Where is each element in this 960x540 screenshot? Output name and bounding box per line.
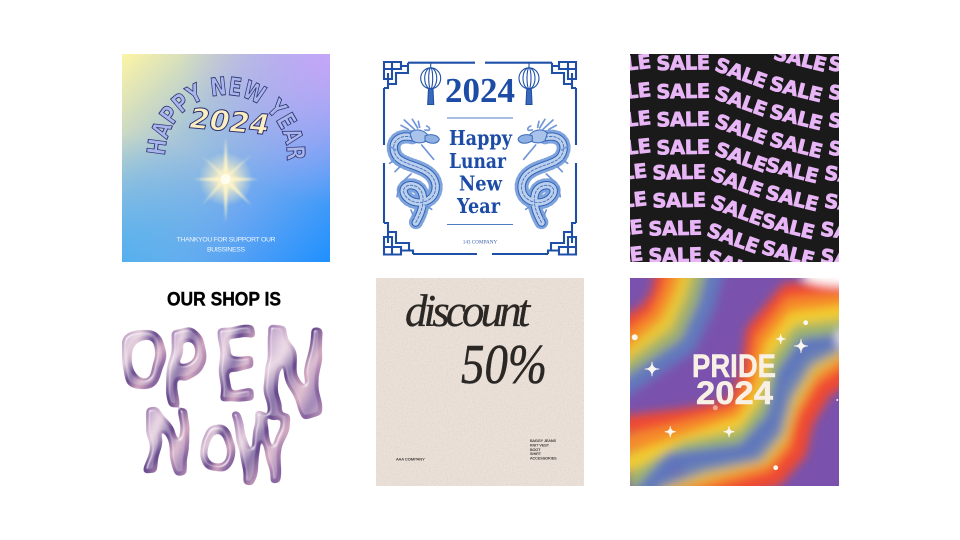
- panel: pride 2024 poster: [630, 278, 839, 486]
- icon: sparkling star: [194, 137, 258, 222]
- chrome lettering: P: [165, 314, 202, 428]
- title: [694, 354, 776, 404]
- thank you message: THANKYOU FOR SUPPORT OUR: [176, 236, 276, 244]
- repeated sale words: SALE: [648, 217, 702, 240]
- illustration: left dragon: [390, 119, 439, 223]
- greeting text: Year: [456, 194, 501, 218]
- illustration: right dragon: [518, 119, 568, 223]
- repeated sale words: SALE: [652, 189, 706, 212]
- repeated sale words: SALE: [763, 181, 821, 216]
- greeting text: Lunar: [449, 149, 507, 173]
- repeated sale words: SALE: [763, 153, 821, 188]
- repeated sale words: SALE: [656, 80, 710, 103]
- arched heading: HAPPY NEW YEAR: [146, 76, 306, 161]
- chrome lettering: [122, 324, 323, 486]
- repeated sale words: SALE: [596, 78, 652, 107]
- repeated sale words: SALE: [759, 209, 817, 244]
- panel: wavy sale pattern: [630, 54, 839, 262]
- repeated sale words: SALE: [827, 80, 883, 111]
- repeated sale words: SALE: [592, 187, 648, 216]
- chrome lettering: O: [201, 418, 236, 488]
- panel: happy lunar new year poster: [384, 62, 576, 254]
- repeated sale words: SALE: [819, 244, 875, 275]
- repeated sale words: SALE: [656, 108, 710, 131]
- icon: left lantern: [421, 63, 441, 104]
- repeated sale words: SALE: [823, 189, 879, 220]
- purple background: [630, 278, 839, 486]
- product list: BOOT: [530, 448, 541, 452]
- repeated sale words: SALE: [588, 215, 644, 244]
- repeated sale words: SALE: [819, 217, 875, 248]
- divider bottom: [447, 224, 513, 226]
- repeated sale words: SALE: [712, 110, 770, 149]
- repeated sale words: SALE: [648, 244, 702, 267]
- sparkles: [632, 320, 838, 470]
- title: 2024: [696, 375, 773, 411]
- repeated sale words: SALE: [596, 134, 652, 163]
- gradient background: [122, 54, 330, 262]
- repeated sale words: SALE: [588, 242, 644, 271]
- repeated sale words: SALE: [767, 100, 825, 135]
- product list: [530, 439, 557, 460]
- chrome lettering: N: [141, 394, 193, 494]
- panel: discount poster: [376, 278, 584, 486]
- repeated sale words: SALE: [656, 136, 710, 159]
- thank you message: BUISSINESS: [207, 246, 245, 254]
- heading: OUR SHOP IS: [167, 290, 281, 310]
- title: PRIDE: [692, 348, 776, 384]
- repeated sale words: SALE: [771, 42, 829, 77]
- greeting text: [449, 126, 513, 218]
- repeated sale words: SALE: [712, 53, 770, 93]
- repeated sale words: SALE: [652, 161, 706, 184]
- greeting text: New: [459, 172, 503, 196]
- chrome lettering: O: [120, 319, 167, 403]
- repeated sale words: SALE: [759, 236, 817, 271]
- repeated sale words: SALE: [767, 72, 825, 107]
- chrome lettering: E: [213, 313, 261, 420]
- product list: ACCESSORIES: [530, 456, 557, 460]
- greeting text: Happy: [449, 126, 513, 150]
- repeated sale words: SALE: [827, 136, 883, 167]
- repeated sale words: SALE: [656, 51, 710, 75]
- panel: happy new year poster: [122, 54, 330, 262]
- discount heading: discount: [405, 286, 532, 336]
- company name: AAA COMPANY: [396, 456, 425, 462]
- repeated sale words: SALE: [708, 191, 766, 230]
- dark background: [630, 54, 839, 262]
- percent figure: 50%: [461, 334, 547, 396]
- thank you message: [176, 236, 276, 254]
- repeated sale words: SALE: [712, 82, 770, 121]
- ornamental border: [384, 62, 576, 254]
- repeated sale words: SALE: [708, 163, 766, 202]
- repeated sale words: SALE: [712, 138, 770, 177]
- repeated sale words: SALE: [704, 246, 762, 285]
- chrome lettering: N: [262, 307, 326, 442]
- repeated sale words: SALE: [592, 159, 648, 188]
- year 2024: 2024: [185, 102, 274, 141]
- repeated sale words: [630, 54, 839, 262]
- product list: SHIRT: [530, 452, 542, 456]
- chrome lettering: W: [232, 398, 289, 500]
- panel: our shop is open now poster: [122, 292, 323, 486]
- company name: 143 COMPANY: [463, 240, 498, 246]
- product list: BAGGY JEANS: [530, 439, 556, 443]
- repeated sale words: SALE: [823, 161, 879, 192]
- divider top: [447, 117, 513, 119]
- rainbow waves: [630, 278, 839, 486]
- year heading: 2024: [445, 71, 515, 110]
- product list: KNIT VEST: [530, 444, 550, 448]
- repeated sale words: SALE: [827, 108, 883, 139]
- repeated sale words: SALE: [596, 106, 652, 135]
- repeated sale words: SALE: [767, 128, 825, 163]
- icon: right lantern: [519, 63, 539, 104]
- repeated sale words: SALE: [827, 52, 883, 82]
- paper background: [376, 278, 584, 486]
- repeated sale words: SALE: [704, 219, 762, 258]
- repeated sale words: SALE: [596, 50, 652, 78]
